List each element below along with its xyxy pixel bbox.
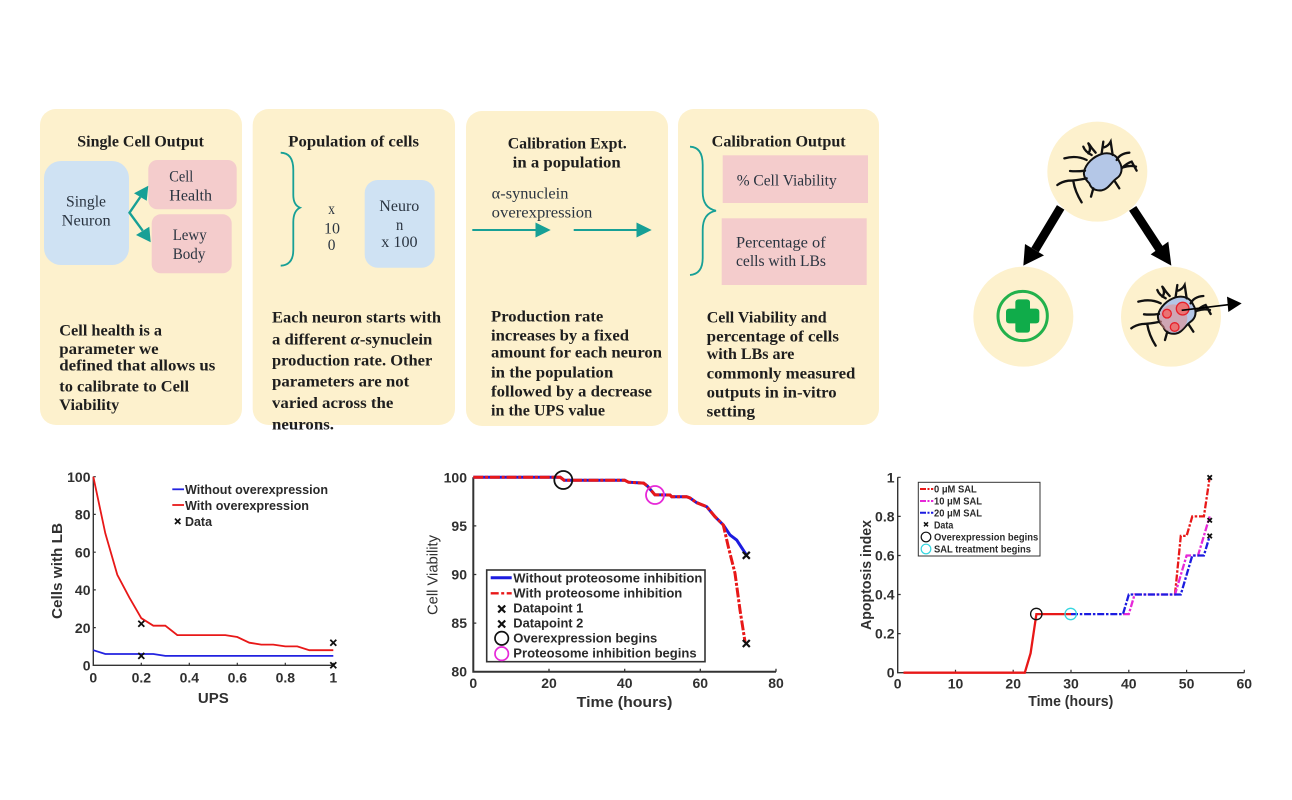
label: alpha-synuclein overexpression: α-synuclein — [492, 185, 569, 202]
legend: 20 μM SAL — [934, 509, 982, 520]
markers: data — [1208, 475, 1212, 538]
x tick labels: 30 — [1063, 675, 1079, 691]
text: x 100 multiplier: 0 — [328, 237, 336, 254]
legend — [172, 483, 328, 529]
marker: overexpression begins — [554, 471, 572, 489]
line: 0 uM SAL — [904, 614, 1071, 673]
text: outputs description: outputs in in-vitro — [707, 384, 837, 401]
line: 0 uM SAL after treatment — [1175, 477, 1210, 594]
x axis title: Time (hours) — [1028, 693, 1113, 710]
text: population description: a different α-synuclein — [272, 331, 432, 348]
y tick labels: 0.2 — [875, 626, 895, 642]
y axis title: Apoptosis index — [858, 519, 875, 630]
box: single neuron: Single — [66, 194, 106, 211]
arrow: first step — [472, 222, 551, 238]
brace: population — [281, 153, 300, 266]
x tick labels: 60 — [1237, 675, 1252, 691]
y tick labels: 95 — [451, 518, 467, 534]
heading: population of cells: Population of cells — [288, 134, 419, 151]
y tick labels — [444, 469, 467, 680]
y tick labels: 0 — [83, 658, 91, 674]
y axis title: Cell Viability — [424, 535, 441, 615]
text: cell health description: to calibrate to Cell — [59, 379, 190, 396]
y tick labels: 0.4 — [875, 586, 895, 602]
heading: calibration output: Calibration Output — [712, 134, 846, 151]
x tick labels: 60 — [693, 675, 708, 691]
legend: Without overexpression — [185, 483, 328, 497]
legend: Overexpression begins — [934, 533, 1039, 544]
box: cell health — [148, 160, 237, 209]
markers: data — [138, 621, 336, 668]
box: percent cell viability — [723, 155, 868, 203]
y tick labels: 100 — [67, 469, 91, 485]
chart: apoptosis index vs time — [858, 469, 1252, 710]
box: single neuron — [44, 161, 129, 265]
chart: cells with LB vs UPS — [49, 469, 337, 707]
line: with overexpression — [93, 477, 333, 650]
y tick labels: 80 — [451, 664, 467, 680]
box: lewy body: Lewy — [173, 227, 207, 244]
arrow: to lewy body outcome — [1133, 208, 1171, 266]
text: population description: varied across the — [272, 395, 393, 412]
arrow: neuron forks to outputs — [130, 186, 151, 242]
text: population description: Each neuron starts with — [272, 310, 441, 327]
box: percentage of cells with LBs: cells with LBs — [736, 253, 826, 270]
text: calibration description: in the UPS value — [491, 402, 605, 419]
box: lewy body — [152, 214, 232, 273]
x tick labels: 20 — [541, 675, 557, 691]
line: 20 uM SAL — [1071, 536, 1210, 614]
text: outputs description: commonly measured — [707, 365, 856, 382]
y axis title: Cells with LB — [49, 523, 66, 619]
line: with proteosome inhibition — [473, 477, 745, 642]
legend: Datapoint 2 — [513, 617, 583, 631]
line: without proteosome inhibition — [473, 477, 746, 554]
text: calibration description: followed by a decrease — [491, 383, 652, 400]
y tick labels: 20 — [75, 620, 91, 636]
y tick labels: 40 — [75, 582, 91, 598]
x tick labels: 40 — [617, 675, 633, 691]
brace: outputs — [690, 147, 716, 275]
text: calibration description: amount for each neuron — [491, 345, 662, 362]
text: population description: parameters are not — [272, 374, 410, 391]
icon: green health cross — [973, 267, 1073, 367]
legend: 0 μM SAL — [934, 484, 977, 495]
icon: healthy neuron circle — [1047, 122, 1147, 222]
legend: 10 μM SAL — [934, 496, 982, 507]
panel: single cell output — [40, 109, 242, 425]
y tick labels: 0.8 — [875, 508, 895, 524]
arrow: to healthy outcome — [1023, 207, 1061, 266]
panel: population of cells — [253, 109, 455, 433]
panel: calibration output — [678, 109, 879, 425]
legend — [487, 570, 705, 662]
text: outputs description — [707, 310, 856, 421]
legend: Overexpression begins — [513, 632, 657, 646]
y tick labels — [875, 469, 895, 681]
text: cell health description — [59, 323, 215, 414]
text: calibration description: in the population — [491, 364, 613, 381]
text: cell health description: Viability — [59, 397, 119, 414]
text: population description — [272, 310, 441, 433]
x tick labels: 0.8 — [276, 670, 295, 686]
box: lewy body: Body — [173, 246, 206, 263]
x tick labels — [894, 675, 1252, 691]
marker: SAL treatment begins — [1065, 608, 1076, 620]
y tick labels: 1 — [887, 469, 895, 485]
x tick labels: 80 — [768, 675, 784, 691]
text: calibration description — [491, 309, 662, 419]
schematic: neuron fates — [973, 122, 1242, 367]
box: neuron x 100: Neuro — [379, 198, 420, 215]
box: neuron x 100 — [365, 180, 435, 268]
legend: SAL treatment begins — [934, 545, 1031, 556]
axes — [93, 477, 333, 665]
box: single neuron: Neuron — [62, 213, 111, 230]
y tick labels: 90 — [451, 566, 467, 582]
line: 10 uM SAL — [1123, 516, 1210, 614]
x tick labels — [469, 675, 784, 691]
x tick labels: 0.6 — [228, 670, 247, 686]
text: outputs description: Cell Viability and — [707, 310, 827, 327]
panel: calibration experiment — [466, 111, 668, 426]
axes — [473, 477, 776, 672]
box: neuron x 100: x 100 — [381, 234, 418, 251]
legend: Data — [185, 515, 213, 529]
box: cell health: Health — [169, 188, 212, 205]
y tick labels: 0 — [887, 665, 895, 681]
text: outputs description: with LBs are — [707, 346, 794, 363]
chart: cell viability vs time — [424, 469, 784, 711]
x tick labels: 20 — [1005, 675, 1021, 691]
box: cell health: Cell — [169, 169, 193, 186]
markers: datapoints — [743, 552, 750, 647]
y tick labels: 0.6 — [875, 548, 895, 564]
x tick labels: 40 — [1121, 675, 1137, 691]
y tick labels: 100 — [444, 469, 467, 485]
text: x 100 multiplier: 10 — [324, 220, 340, 237]
legend: Proteosome inhibition begins — [513, 647, 697, 661]
arrow: second step — [574, 222, 652, 238]
x tick labels — [89, 670, 337, 686]
box: percentage of cells with LBs: Percentage of — [736, 234, 827, 251]
text: cell health description: Cell health is a — [59, 323, 162, 340]
legend: With overexpression — [185, 499, 309, 513]
text: calibration description: Production rate — [491, 309, 603, 326]
x axis title: UPS — [198, 690, 229, 707]
legend: Without proteosome inhibition — [513, 572, 702, 586]
text: cell health description: parameter we — [59, 341, 159, 358]
y tick labels — [67, 469, 91, 674]
legend: Datapoint 1 — [513, 602, 583, 616]
text: outputs description: setting — [707, 404, 755, 421]
y tick labels: 80 — [75, 507, 91, 523]
legend: With proteosome inhibition — [513, 586, 682, 600]
x tick labels: 10 — [948, 675, 963, 691]
x tick labels: 1 — [329, 670, 337, 686]
text: x 100 multiplier: x — [328, 201, 335, 218]
text: population description: neurons. — [272, 416, 334, 433]
x tick labels: 0.2 — [132, 670, 151, 686]
heading: calibration experiment: Calibration Expt. — [508, 135, 627, 152]
heading: calibration experiment — [508, 135, 627, 172]
heading: calibration experiment: in a population — [513, 155, 621, 172]
text: calibration description: increases by a fixed — [491, 328, 629, 345]
label: alpha-synuclein overexpression: overexpression — [492, 204, 593, 221]
x tick labels: 0 — [469, 675, 477, 691]
y tick labels: 85 — [451, 615, 467, 631]
box: percent cell viability: % Cell Viability — [737, 173, 837, 190]
x axis title: Time (hours) — [577, 694, 672, 711]
text: outputs description: percentage of cells — [707, 329, 839, 346]
x tick labels: 50 — [1179, 675, 1195, 691]
x tick labels: 0 — [894, 675, 902, 691]
x tick labels: 0.4 — [180, 670, 199, 686]
axes — [898, 477, 1244, 673]
heading: single cell output: Single Cell Output — [77, 134, 205, 151]
marker: proteosome inhibition begins — [646, 486, 664, 504]
marker: overexpression begins — [1031, 608, 1042, 620]
icon: neuron with lewy bodies — [1121, 267, 1221, 367]
text: population description: production rate. Other — [272, 352, 432, 369]
text: cell health description: defined that allows us — [59, 358, 215, 375]
legend — [918, 482, 1040, 556]
label: alpha-synuclein overexpression — [492, 185, 593, 221]
y tick labels: 60 — [75, 544, 91, 560]
arrow: lewy body export — [1182, 297, 1242, 312]
legend: Data — [934, 520, 954, 531]
box: neuron x 100: n — [396, 217, 404, 234]
line: without overexpression — [93, 650, 333, 656]
box: percentage of cells with LBs — [722, 218, 867, 285]
text: x 100 multiplier — [324, 201, 340, 254]
x tick labels: 0 — [89, 670, 97, 686]
